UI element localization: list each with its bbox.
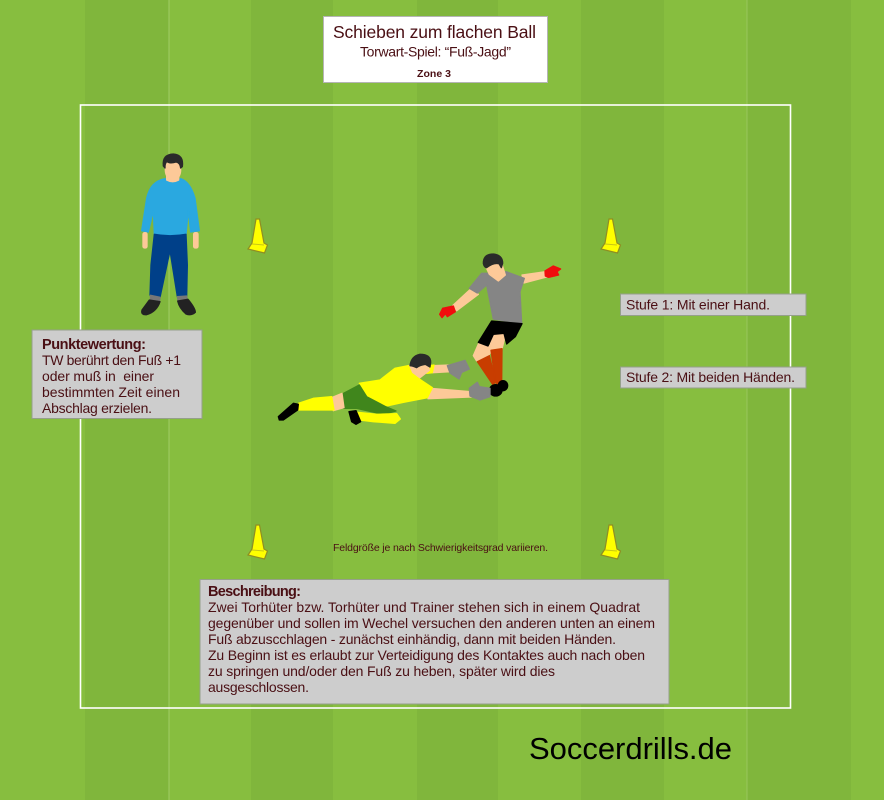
subtitle: Torwart-Spiel: “Fuß-Jagd” <box>360 44 511 60</box>
scoring text: TW berührt den Fuß +1 <box>42 352 181 368</box>
brand: Soccerdrills.de <box>529 731 732 766</box>
scoring text: bestimmten Zeit einen <box>42 384 180 400</box>
icon: standing goalkeeper in grey <box>440 254 561 396</box>
icon: cone top left <box>248 219 268 253</box>
callout: Stufe 1 <box>620 294 806 316</box>
scoring text <box>42 352 181 416</box>
callout: Stufe 2 <box>620 367 806 388</box>
scoring text: Abschlag erzielen. <box>42 400 152 416</box>
field boundary <box>80 105 790 708</box>
callout: Stufe 1: Stufe 1: Mit einer Hand. <box>626 296 770 312</box>
description text: zu springen und/oder den Fuß zu heben, später wird dies <box>208 663 555 679</box>
icon: cone top right <box>601 219 620 253</box>
title: Schieben zum flachen Ball <box>333 22 536 42</box>
icon: diving goalkeeper in yellow <box>278 354 490 424</box>
panel: Punktewertung <box>32 330 202 418</box>
icon: coach figure <box>142 154 199 315</box>
callout: Stufe 2: Stufe 2: Mit beiden Händen. <box>626 369 795 385</box>
scoring text: oder muß in einer <box>42 368 154 384</box>
title box <box>324 16 548 82</box>
zone label: Zone 3 <box>417 68 451 80</box>
description text <box>208 599 655 695</box>
description text: gegenüber und sollen im Wechel versuchen den anderen unten an einem <box>208 615 655 631</box>
description text: ausgeschlossen. <box>208 679 309 695</box>
description heading: Beschreibung: <box>208 584 301 600</box>
description text: Fuß abzuscchlagen - zunächst einhändig, dann mit beiden Händen. <box>208 631 616 647</box>
description text: Zwei Torhüter bzw. Torhüter und Trainer stehen sich in einem Quadrat <box>208 599 640 615</box>
icon: cone bottom right <box>601 525 620 559</box>
panel heading: Punktewertung: <box>42 337 146 353</box>
note: field size: Feldgröße je nach Schwierigkeitsgrad variieren. <box>333 542 548 554</box>
panel: Beschreibung <box>200 580 669 704</box>
icon: cone bottom left <box>248 525 268 559</box>
description text: Zu Beginn ist es erlaubt zur Verteidigung des Kontaktes auch nach oben <box>208 647 645 663</box>
